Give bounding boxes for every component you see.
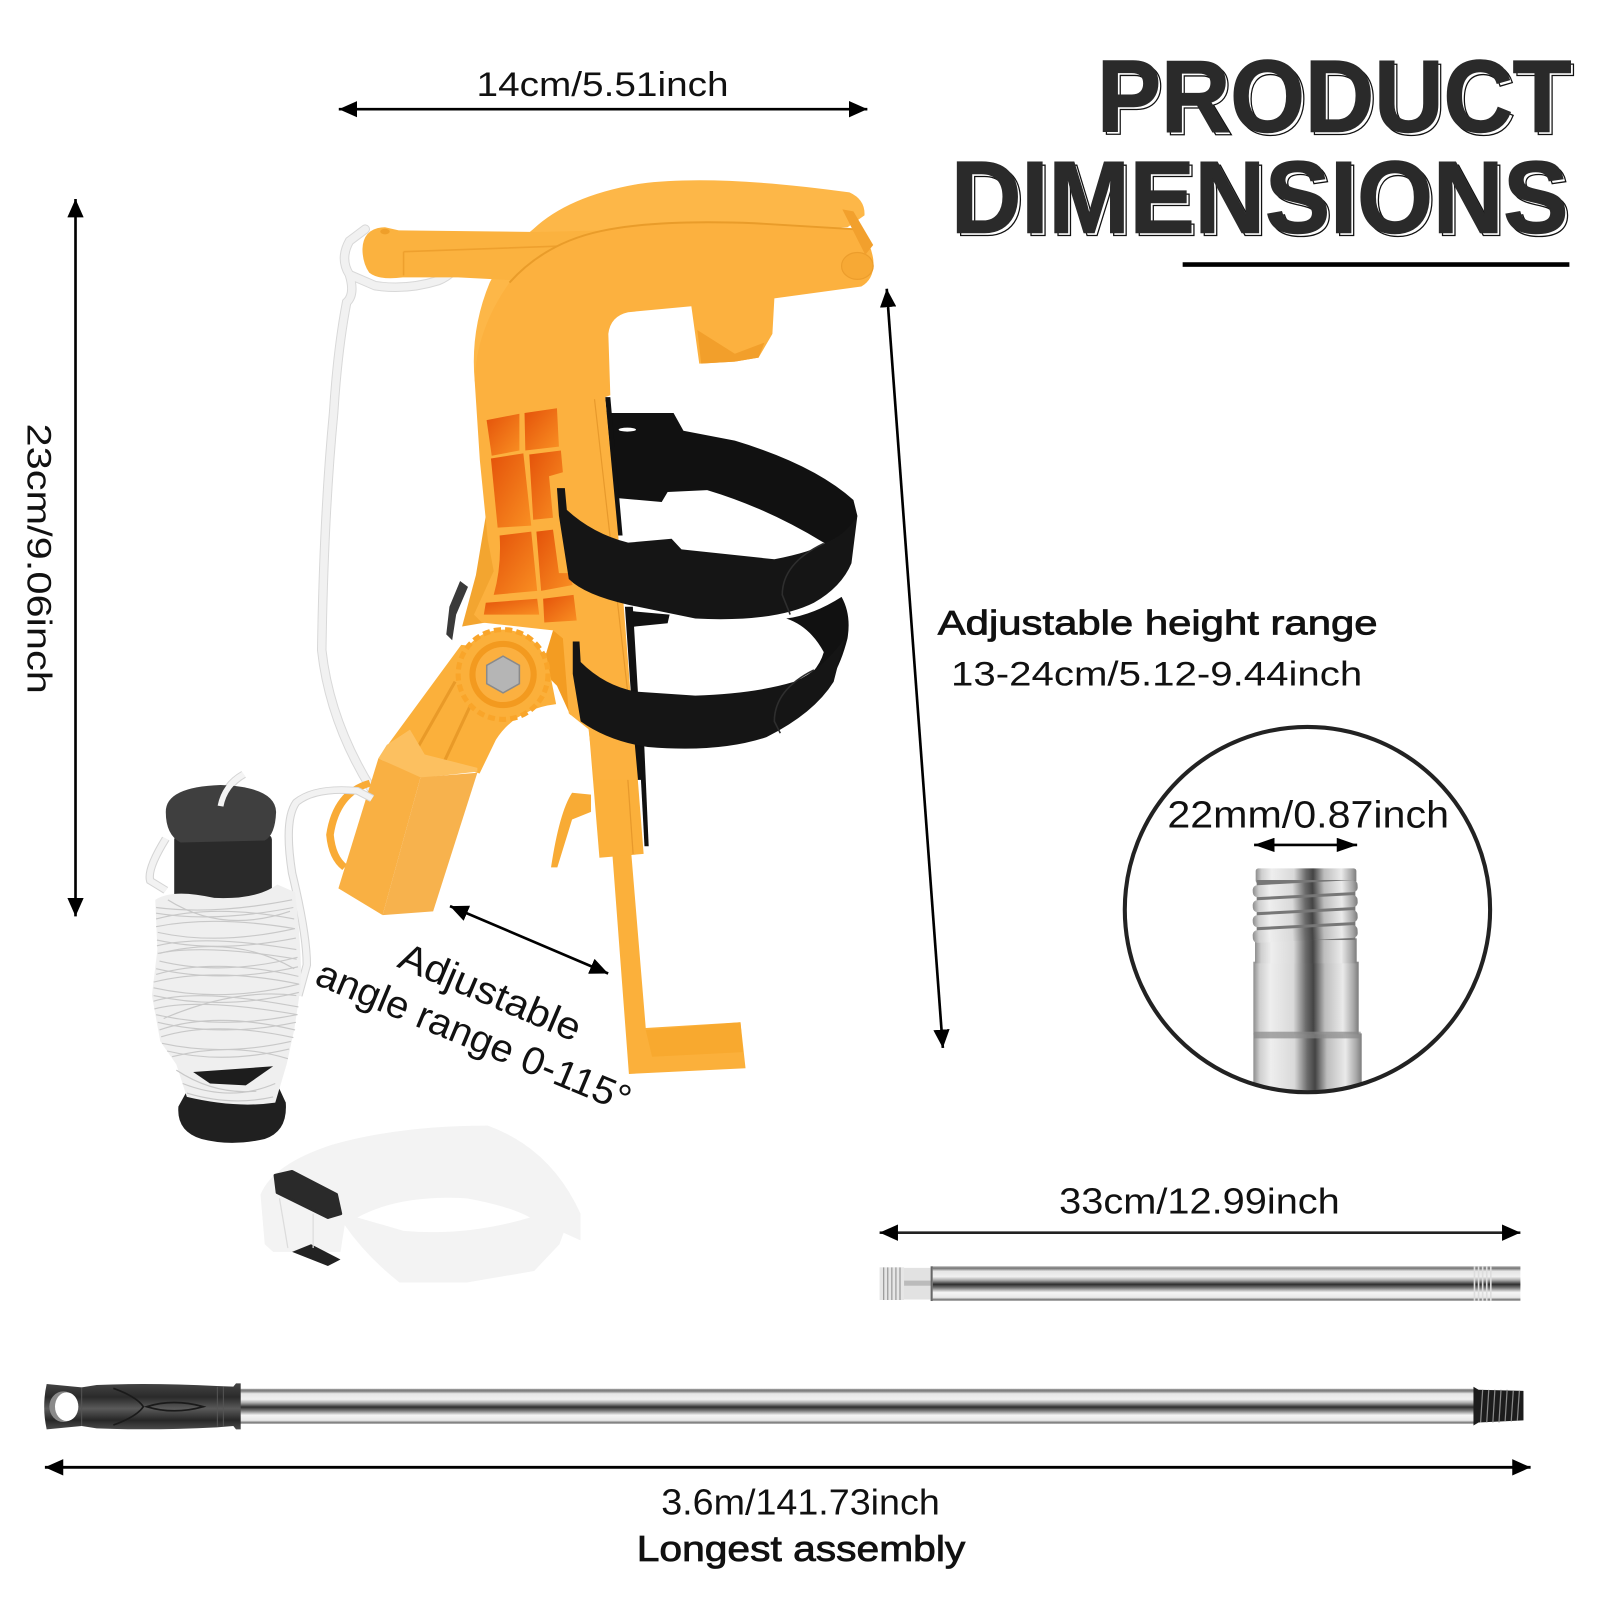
spool neck — [174, 835, 272, 900]
33cm section rod: 33cm/12.99inch — [1059, 1181, 1340, 1221]
long assembled pole — [44, 1383, 1523, 1429]
bracket block — [330, 730, 477, 915]
lever bar — [362, 227, 604, 281]
angle dimension: angle range 0-115° — [310, 952, 637, 1121]
height range label: Adjustable height range — [938, 605, 1378, 643]
black backing strip — [605, 397, 643, 780]
title: PRODUCT — [1097, 40, 1571, 154]
front strap upper — [557, 488, 857, 619]
title: PRODUCT — [1100, 43, 1574, 157]
rope from bracket — [322, 229, 472, 789]
33cm section rod — [880, 1181, 1520, 1301]
wedge by hub — [541, 630, 570, 715]
recessed orange panels — [487, 414, 519, 456]
title: DIMENSIONS — [954, 144, 1571, 258]
spool top cap — [166, 785, 276, 842]
back strap upper — [606, 413, 857, 555]
front strap lower — [573, 638, 845, 749]
height range label: 13-24cm/5.12-9.44inch — [951, 656, 1362, 694]
height range label — [938, 605, 1378, 694]
title — [951, 40, 1574, 267]
angle dimension: Adjustable — [392, 935, 588, 1050]
white strap — [261, 1126, 580, 1282]
detail circle: 22mm rod end: 22mm/0.87inch — [1167, 794, 1449, 836]
total length dimension: 3.6m/141.73inch — [661, 1482, 940, 1522]
threaded black tip — [1473, 1387, 1523, 1426]
rope strand to bracket — [150, 774, 372, 996]
detail circle: 22mm rod end — [1125, 727, 1490, 1097]
title: DIMENSIONS — [951, 141, 1568, 255]
product: yellow bracket with straps — [322, 180, 873, 1074]
side wedge — [462, 516, 496, 626]
back strap lower — [626, 597, 849, 690]
hardware nut — [446, 581, 468, 640]
bracket lower arm — [388, 645, 556, 773]
total length dimension: Longest assembly — [637, 1529, 965, 1569]
adjustment hub — [458, 630, 548, 719]
front arm and body — [474, 222, 873, 780]
back arm — [474, 180, 865, 381]
rod detail — [1253, 1033, 1362, 1097]
rope spool — [150, 774, 372, 1143]
block faces — [378, 730, 477, 778]
height range arrow — [887, 289, 943, 1048]
wound rope — [152, 885, 301, 1105]
black grip — [44, 1383, 241, 1429]
bracket column and leg — [551, 712, 746, 1074]
height dimension: 23cm: 23cm/9.06inch — [20, 423, 58, 694]
width dimension: 14cm: 14cm/5.51inch — [477, 66, 729, 104]
spool bottom cap — [178, 1080, 286, 1143]
loop on block — [330, 783, 370, 867]
bracket upper part — [362, 180, 873, 780]
total length dimension — [45, 1467, 1531, 1569]
